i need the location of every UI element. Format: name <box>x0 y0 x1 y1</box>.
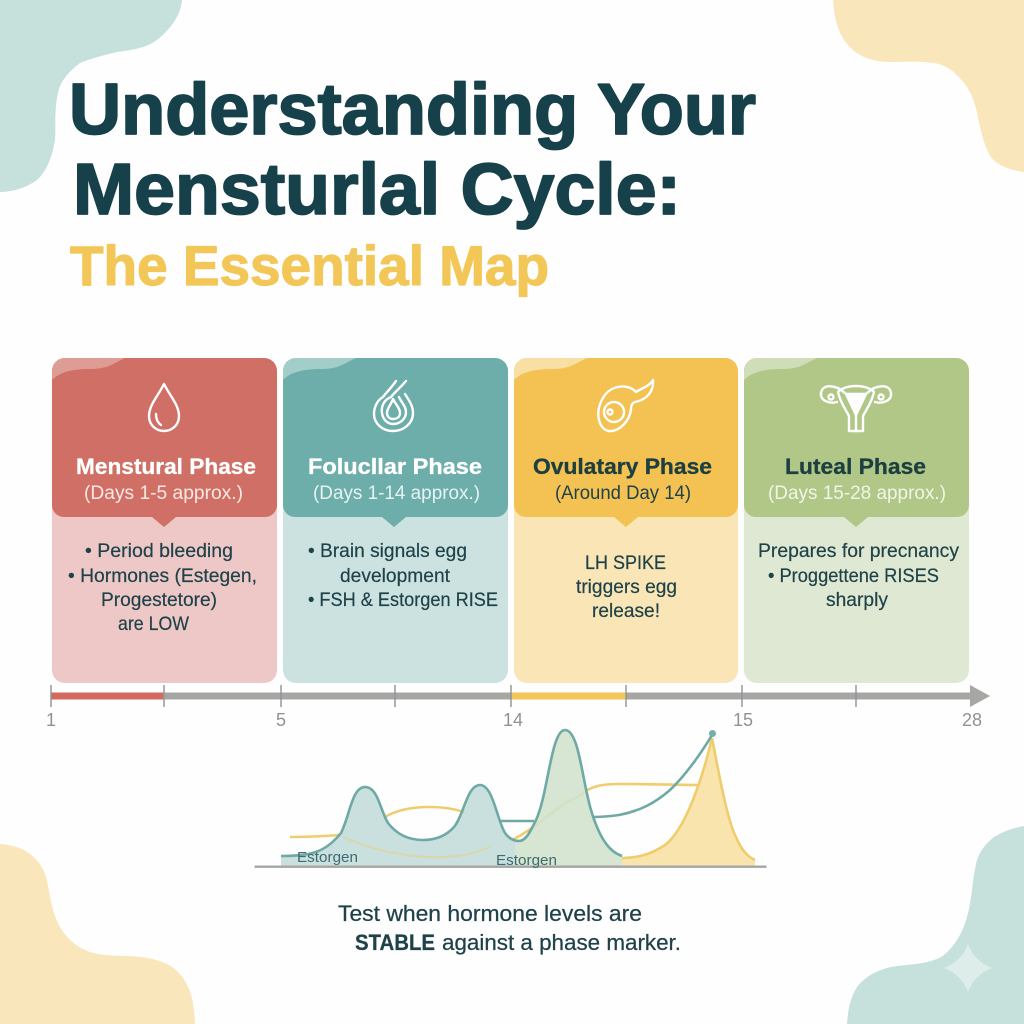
panel: ovulatory phase <box>514 358 738 683</box>
panel: luteal phase <box>744 358 969 683</box>
footer note: Test when hormone levels are <box>338 901 642 926</box>
text: follicular details <box>308 540 498 611</box>
text: ovulatory details <box>576 552 677 622</box>
corner blob: top left <box>0 0 182 192</box>
axis day labels <box>46 710 982 730</box>
text: follicular details: • Brain signals egg <box>308 540 467 562</box>
text: follicular details: • FSH & Estorgen RISE <box>308 589 498 611</box>
yellow hormone line <box>290 784 701 840</box>
text: luteal details: sharply <box>826 589 888 611</box>
text: menstrual details: • Hormones (Estegen, <box>68 565 257 587</box>
axis day labels: 28 <box>962 710 982 730</box>
icon: sparkle <box>944 944 992 992</box>
heading: menstrual: Menstural Phase <box>76 454 256 479</box>
axis day labels: 1 <box>46 710 56 730</box>
chart label: estrogen middle: Estorgen <box>496 853 557 869</box>
text: menstrual details <box>68 540 257 635</box>
teal hormone line <box>281 730 712 856</box>
heading: ovulatory: Ovulatary Phase <box>533 454 712 479</box>
text: menstrual details: Progestetore) <box>101 589 217 611</box>
text: follicular details: development <box>340 565 451 587</box>
panel: follicular phase <box>283 358 508 683</box>
chart label: estrogen left: Estorgen <box>297 850 358 866</box>
chart peak marker <box>709 730 716 737</box>
days: luteal: (Days 15-28 approx.) <box>768 483 946 504</box>
axis day labels: 15 <box>733 710 753 730</box>
footer note: against a phase marker. <box>442 930 681 955</box>
chart baseline <box>254 866 766 868</box>
yellow peak line <box>622 738 755 860</box>
icon: egg release <box>598 380 653 431</box>
heading: follicular: Folucllar Phase <box>308 454 482 479</box>
corner blob: bottom left <box>0 844 195 1024</box>
icon: uterus <box>821 386 891 431</box>
faded yellow line under fill <box>343 837 490 857</box>
text: ovulatory details: triggers egg <box>576 576 677 598</box>
icon: water drop <box>149 384 179 431</box>
footer note: STABLE <box>355 930 435 955</box>
subtitle: The Essential Map <box>70 234 549 297</box>
text: luteal details <box>758 540 959 611</box>
axis day labels: 5 <box>276 710 286 730</box>
chart fill: teal area <box>281 785 515 867</box>
text: luteal details: Prepares for precnancy <box>758 540 959 562</box>
corner blob: bottom right <box>847 826 1024 1024</box>
text: menstrual details: are LOW <box>118 613 190 635</box>
title: Understanding Your <box>69 70 756 150</box>
days: follicular: (Days 1-14 approx.) <box>313 483 480 504</box>
panel: menstrual phase <box>52 358 277 683</box>
title <box>69 70 756 230</box>
chart fill: green area <box>515 730 622 867</box>
hormone chart <box>254 730 766 869</box>
days: ovulatory: (Around Day 14) <box>555 483 691 504</box>
axis day labels: 14 <box>503 710 523 730</box>
timeline axis <box>46 685 990 730</box>
title: Mensturlal Cycle: <box>73 150 681 230</box>
icon: follicle <box>374 381 413 431</box>
text: ovulatory details: release! <box>592 600 660 622</box>
corner blob: top right <box>833 0 1024 172</box>
chart fill: yellow peak <box>622 738 755 867</box>
days: menstrual: (Days 1-5 approx.) <box>84 483 243 504</box>
heading: luteal: Luteal Phase <box>785 454 926 479</box>
text: ovulatory details: LH SPIKE <box>585 552 666 574</box>
footer note <box>338 901 681 955</box>
text: luteal details: • Proggettene RISES <box>768 565 939 587</box>
text: menstrual details: • Period bleeding <box>85 540 233 562</box>
